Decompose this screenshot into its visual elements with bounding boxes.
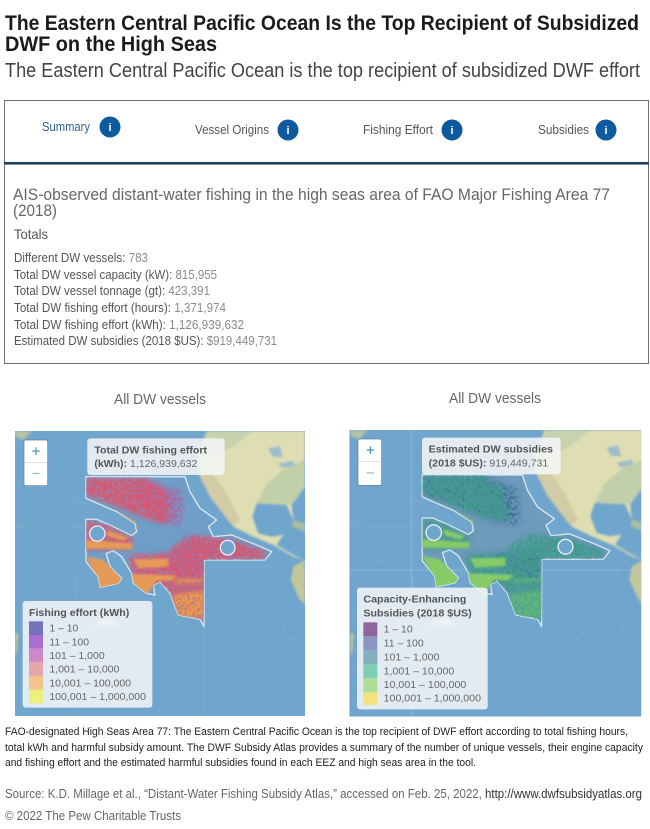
legend: capacity-enhancing subsidies: Capacity-Enhancing: [363, 595, 466, 606]
totals list: Total DW fishing effort (kWh): 1,126,939,632: [14, 318, 244, 332]
zoom control: +: [32, 444, 41, 461]
zoom control: −: [32, 466, 41, 483]
totals list: Estimated DW subsidies (2018 $US): $919,449,731: [14, 334, 277, 348]
navigation tabs: Fishing Effort: [363, 122, 433, 137]
zoom control: +: [366, 443, 375, 460]
panel heading: (2018): [13, 201, 57, 220]
legend: fishing effort: [23, 601, 152, 708]
EEZ holes: [426, 525, 573, 554]
legend: fishing effort: 101 – 1,000: [49, 651, 105, 662]
totals heading: Totals: [14, 226, 48, 242]
navigation tabs: [42, 116, 616, 140]
navigation tabs: i: [604, 125, 608, 137]
map tooltip: (2018 $US): 919,449,731: [429, 458, 548, 469]
zoom control: [24, 440, 48, 486]
high seas region: [422, 475, 610, 627]
copyright: © 2022 The Pew Charitable Trusts: [5, 809, 181, 823]
legend: capacity-enhancing subsidies: [357, 588, 488, 709]
navigation tabs: Vessel Origins: [195, 122, 269, 137]
navigation tabs: Summary: [42, 119, 90, 134]
navigation tabs: Subsidies: [538, 122, 589, 137]
legend: fishing effort: 100,001 – 1,000,000: [49, 692, 146, 703]
legend: fishing effort: 11 – 100: [49, 637, 89, 648]
map tooltip: Total DW fishing effort: [94, 445, 208, 456]
totals list: Total DW vessel capacity (kW): 815,955: [14, 268, 217, 282]
high seas region: [86, 477, 272, 627]
legend: capacity-enhancing subsidies: 11 – 100: [384, 639, 424, 650]
panel heading: [13, 185, 610, 220]
legend: capacity-enhancing subsidies: 10,001 – 100,000: [384, 680, 467, 691]
navigation tabs: i: [450, 125, 454, 137]
legend: capacity-enhancing subsidies: Subsidies (2018 $US): [363, 609, 472, 620]
legend: fishing effort: Fishing effort (kWh): [29, 608, 129, 619]
legend: capacity-enhancing subsidies: 101 – 1,000: [384, 653, 440, 664]
map: fishing effort: [15, 431, 305, 716]
caption: and fishing effort and the estimated harmful subsidies found in each EEZ and high seas area in the tool.: [5, 757, 476, 769]
map: estimated subsidies: [349, 430, 644, 717]
map heading left: All DW vessels: [114, 391, 206, 408]
zoom control: −: [366, 465, 375, 482]
legend: fishing effort: 1 – 10: [49, 624, 79, 635]
legend: fishing effort: 1,001 – 10,000: [49, 665, 120, 676]
panel: atlas summary: [4, 100, 649, 364]
map tooltip: (kWh): 1,126,939,632: [94, 459, 197, 470]
legend: capacity-enhancing subsidies: 1 – 10: [384, 625, 413, 636]
map tooltip: Estimated DW subsidies: [429, 444, 554, 455]
EEZ holes: [90, 526, 235, 555]
totals list: Different DW vessels: 783: [14, 251, 148, 265]
source line: Source: K.D. Millage et al., “Distant-Water Fishing Subsidy Atlas,” accessed on Feb. 25, 2022, http://www.dwfsubsidyatlas.org: [5, 787, 642, 801]
map tooltip: [87, 438, 225, 475]
caption: [5, 726, 643, 769]
totals list: Total DW vessel tonnage (gt): 423,391: [14, 284, 210, 298]
legend: capacity-enhancing subsidies: 100,001 – 1,000,000: [384, 693, 481, 704]
zoom control: [358, 439, 382, 485]
navigation tabs: i: [286, 125, 290, 137]
title: DWF on the High Seas: [5, 32, 217, 56]
legend: capacity-enhancing subsidies: 1,001 – 10,000: [384, 667, 455, 678]
navigation tabs: i: [108, 122, 112, 134]
map tooltip: [422, 438, 561, 474]
title: [5, 11, 639, 56]
panel heading: AIS-observed distant-water fishing in the high seas area of FAO Major Fishing Area 77: [13, 185, 610, 204]
map heading right: All DW vessels: [449, 390, 541, 407]
totals list: Total DW fishing effort (hours): 1,371,974: [14, 301, 226, 315]
totals list: [14, 251, 277, 348]
legend: fishing effort: 10,001 – 100,000: [49, 678, 131, 689]
